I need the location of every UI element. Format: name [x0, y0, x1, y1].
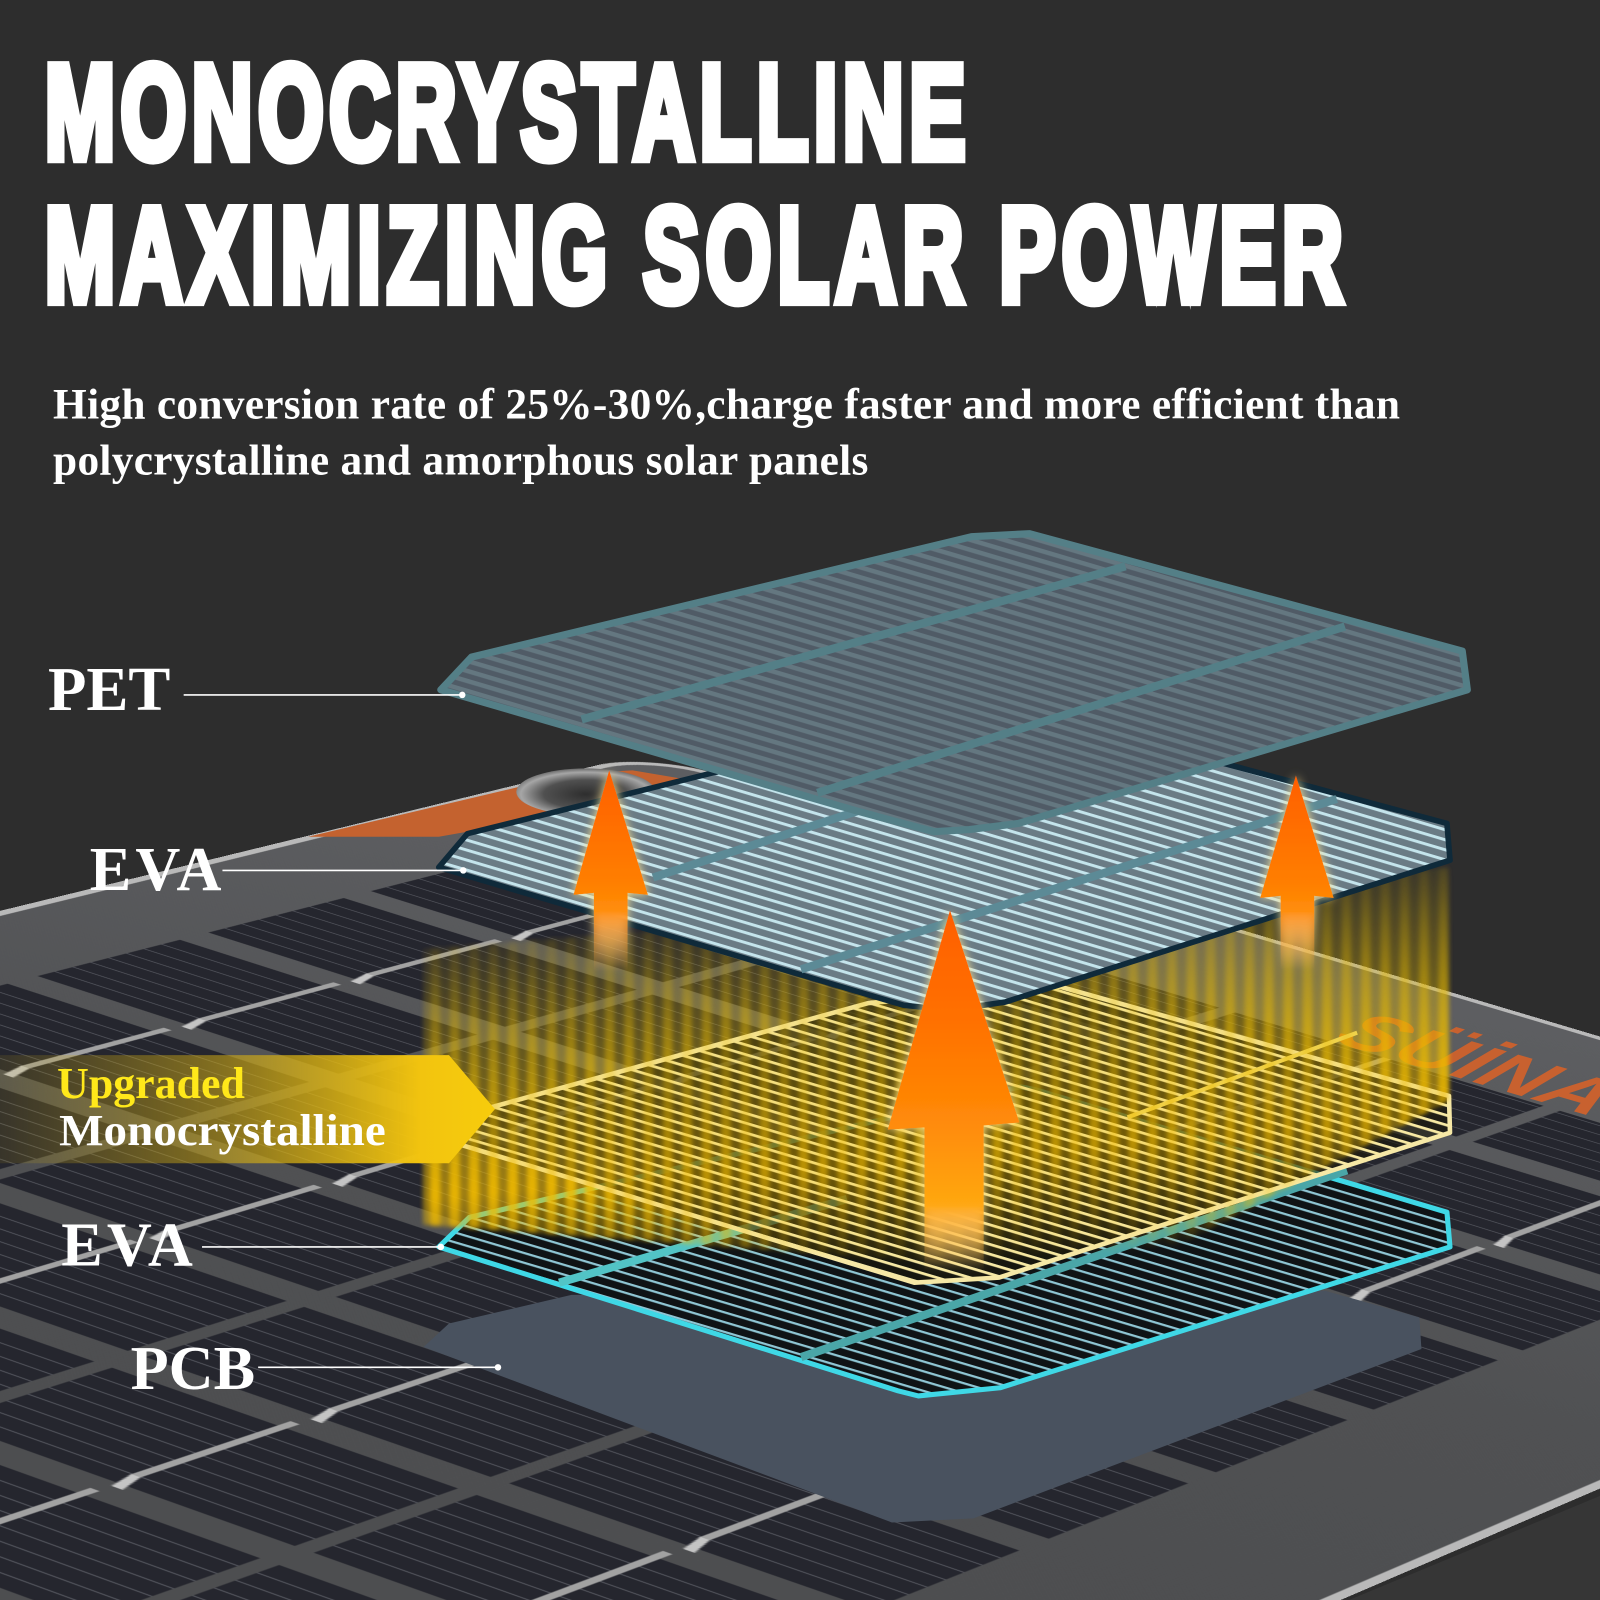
subtitle	[53, 380, 1400, 484]
title	[45, 37, 1343, 330]
layer: upgraded monocrystalline cells	[461, 987, 1450, 1283]
callout: upgraded monocrystalline: Monocrystalline	[59, 1105, 386, 1155]
label: PCB: PCB	[131, 1335, 255, 1403]
label: EVA upper: EVA	[90, 836, 221, 904]
label: PET: PET	[48, 656, 170, 724]
label: PET	[48, 656, 466, 724]
label: PCB	[131, 1335, 501, 1403]
callout: upgraded monocrystalline: Upgraded	[57, 1058, 245, 1108]
label: EVA lower	[61, 1211, 444, 1279]
title: MONOCRYSTALLINE	[45, 37, 965, 187]
label: EVA upper	[90, 836, 467, 904]
layer: lower EVA	[439, 1087, 1450, 1396]
subtitle: polycrystalline and amorphous solar panels	[53, 436, 868, 484]
yellow light glow, front pass	[423, 867, 1449, 1276]
arrow: left	[573, 770, 648, 971]
callout: upgraded monocrystalline	[0, 1055, 495, 1163]
layer: PET	[441, 534, 1467, 832]
arrow: centre	[888, 910, 1019, 1270]
arrow: right	[1260, 776, 1334, 969]
layer: upper EVA	[439, 714, 1450, 1010]
orange corner with grommet	[308, 768, 682, 837]
layer: PCB	[423, 1291, 1421, 1522]
panel body edge bottom right	[1349, 1496, 1600, 1600]
label: EVA lower: EVA	[61, 1211, 193, 1279]
title: MAXIMIZING SOLAR POWER	[45, 180, 1343, 330]
solar panel background	[0, 762, 1600, 1600]
subtitle: High conversion rate of 25%-30%,charge faster and more efficient than	[53, 380, 1400, 428]
yellow light glow, back pass	[423, 867, 1449, 1276]
